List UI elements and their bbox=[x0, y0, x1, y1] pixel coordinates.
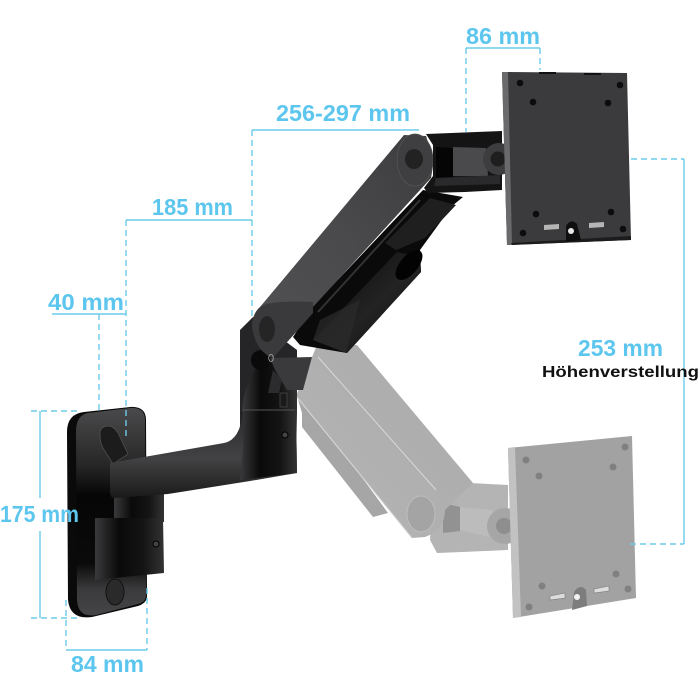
ghost fork bracket bbox=[430, 483, 508, 553]
dimension: 84 mm bbox=[66, 588, 147, 677]
spring tube bbox=[313, 245, 427, 353]
column cylinder top bbox=[242, 362, 297, 412]
dimension: 253 mm height adjustment bbox=[542, 159, 699, 544]
ghost pin bbox=[422, 540, 426, 546]
small pin bbox=[269, 354, 273, 362]
upper arm body bbox=[252, 134, 434, 362]
spring channel bbox=[293, 190, 463, 353]
dimension: 86 mm bbox=[466, 23, 540, 132]
dimension: 175 mm: 175 mm bbox=[0, 501, 79, 527]
dimension: 185 mm: 185 mm bbox=[152, 194, 233, 220]
ghost arm: lowered position bbox=[296, 345, 523, 553]
ghost lower channel bbox=[297, 396, 388, 517]
head fork bracket bbox=[424, 131, 515, 193]
lower pivot cap bbox=[259, 316, 275, 342]
dimension: 253 mm height adjustment: Höhenverstellung bbox=[542, 364, 699, 381]
fork link bbox=[453, 147, 488, 176]
dimension: 253 mm height adjustment: 253 mm bbox=[578, 335, 663, 361]
wall plate front face bbox=[76, 408, 146, 615]
wall plate bbox=[67, 407, 147, 617]
dimension: 40 mm bbox=[48, 289, 126, 410]
ghost fork link bbox=[460, 507, 493, 537]
ghost arm pivot bbox=[407, 496, 435, 532]
dimension: 86 mm: 86 mm bbox=[466, 23, 540, 49]
dimension: 40 mm: 40 mm bbox=[48, 289, 124, 315]
upper pivot cap bbox=[397, 134, 433, 186]
horizontal arm bbox=[110, 409, 297, 498]
dimension: 175 mm bbox=[0, 411, 80, 618]
ghost VESA plate bbox=[508, 436, 636, 618]
lower rotating drum bbox=[95, 518, 164, 580]
upper mounting slot bbox=[100, 426, 128, 464]
ghost arm body bbox=[296, 345, 473, 538]
lower neck bbox=[114, 490, 164, 522]
lower pivot housing bbox=[252, 302, 313, 358]
lower mounting slot bbox=[106, 579, 124, 605]
VESA plate bbox=[502, 72, 631, 245]
ghost fork window bbox=[443, 503, 460, 533]
upper column bbox=[240, 317, 297, 470]
dimension: 84 mm: 84 mm bbox=[71, 651, 144, 677]
lower mechanism bbox=[251, 350, 312, 407]
fork window bbox=[436, 147, 453, 179]
tilt knob bbox=[483, 143, 515, 175]
dimension: 256-297 mm: 256-297 mm bbox=[276, 100, 410, 126]
ghost tilt knob bbox=[487, 508, 523, 544]
